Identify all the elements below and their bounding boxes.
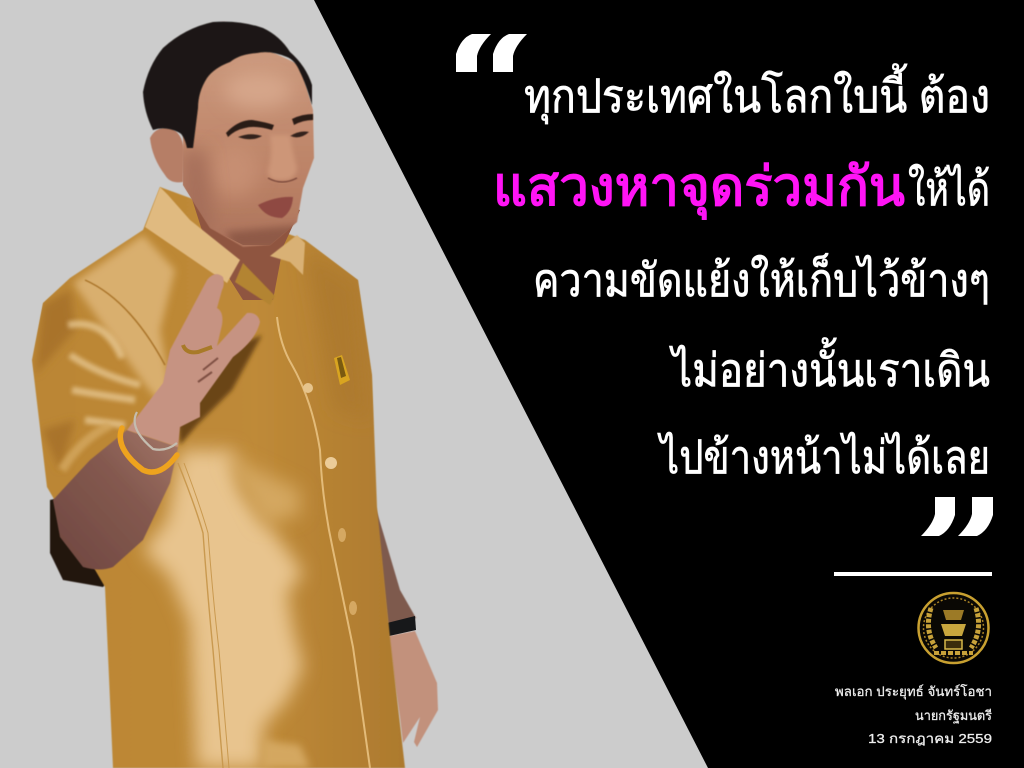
face bbox=[183, 45, 314, 250]
background: black diagonal panel bbox=[314, 0, 1024, 768]
placket seam bbox=[277, 317, 370, 768]
quote line 4: ไม่อย่างนั้นเราเดิน bbox=[668, 337, 990, 396]
neck bbox=[186, 180, 300, 300]
buttons and pin bbox=[303, 355, 357, 615]
speaker name: พลเอก ประยุทธ์ จันทร์โอชา bbox=[835, 684, 992, 700]
icon: Thai government seal bbox=[918, 593, 988, 663]
hair bbox=[143, 22, 312, 148]
finger detail bbox=[198, 358, 218, 382]
right chest shade bbox=[318, 250, 374, 418]
opening quote mark bbox=[456, 34, 527, 72]
shirt torso bbox=[32, 187, 405, 768]
far arm and hand bbox=[375, 505, 438, 747]
date: 13 กรกฎาคม 2559 bbox=[868, 731, 992, 746]
photo: speaker in gold shirt bbox=[32, 22, 438, 768]
brows and eyes bbox=[226, 114, 313, 139]
hand shadow on shirt bbox=[178, 335, 262, 445]
forearm bbox=[53, 430, 178, 570]
sleeve folds bbox=[68, 324, 140, 425]
quote line 2 ending: ให้ได้ bbox=[908, 163, 990, 215]
torso sheen bbox=[143, 450, 303, 768]
mouth bbox=[258, 197, 293, 218]
attribution text bbox=[835, 684, 992, 746]
hand bbox=[127, 274, 260, 447]
quote line 2 emphasis: แสวงหาจุดร่วมกัน bbox=[493, 157, 905, 221]
ear bbox=[150, 128, 184, 182]
nose bbox=[268, 135, 297, 182]
quote text bbox=[493, 63, 990, 483]
speaker title: นายกรัฐมนตรี bbox=[915, 708, 992, 724]
closing quote mark bbox=[921, 497, 993, 536]
collar bbox=[145, 187, 305, 305]
arm shadow bbox=[50, 470, 180, 587]
divider line bbox=[834, 572, 992, 576]
wrist bands bbox=[120, 412, 177, 472]
shoulder sheen bbox=[73, 235, 176, 420]
ring bbox=[183, 345, 212, 352]
